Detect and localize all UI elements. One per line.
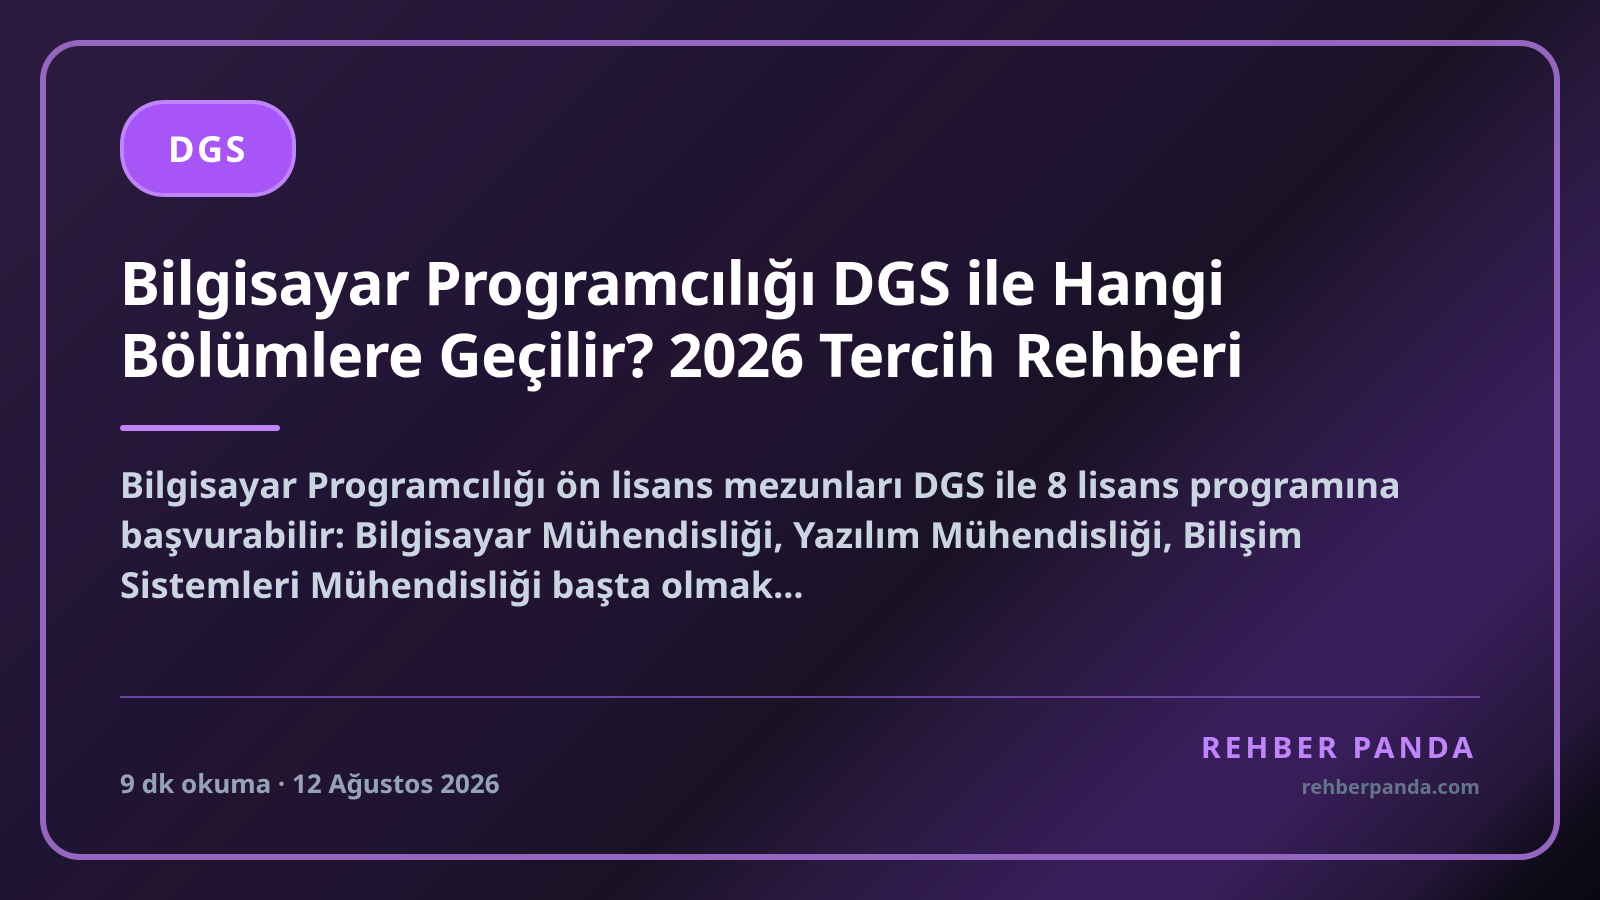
badge: DGS: [120, 100, 296, 197]
description: Sistemleri Mühendisliği başta olmak...: [120, 560, 804, 609]
website: rehberpanda.com: [1302, 773, 1480, 800]
title: Bilgisayar Programcılığı DGS ile Hangi: [120, 241, 1225, 323]
divider: [120, 696, 1480, 698]
accent rule: [120, 425, 280, 431]
badge: DGS: DGS: [168, 124, 248, 173]
title: [120, 241, 1243, 395]
description: [120, 460, 1401, 609]
description: Bilgisayar Programcılığı ön lisans mezunları DGS ile 8 lisans programına: [120, 460, 1401, 509]
description: başvurabilir: Bilgisayar Mühendisliği, Yazılım Mühendisliği, Bilişim: [120, 510, 1303, 559]
title: Bölümlere Geçilir? 2026 Tercih Rehberi: [120, 313, 1243, 395]
brand name: REHBER PANDA: [1201, 726, 1477, 767]
reading time and date: 9 dk okuma · 12 Ağustos 2026: [120, 765, 500, 801]
